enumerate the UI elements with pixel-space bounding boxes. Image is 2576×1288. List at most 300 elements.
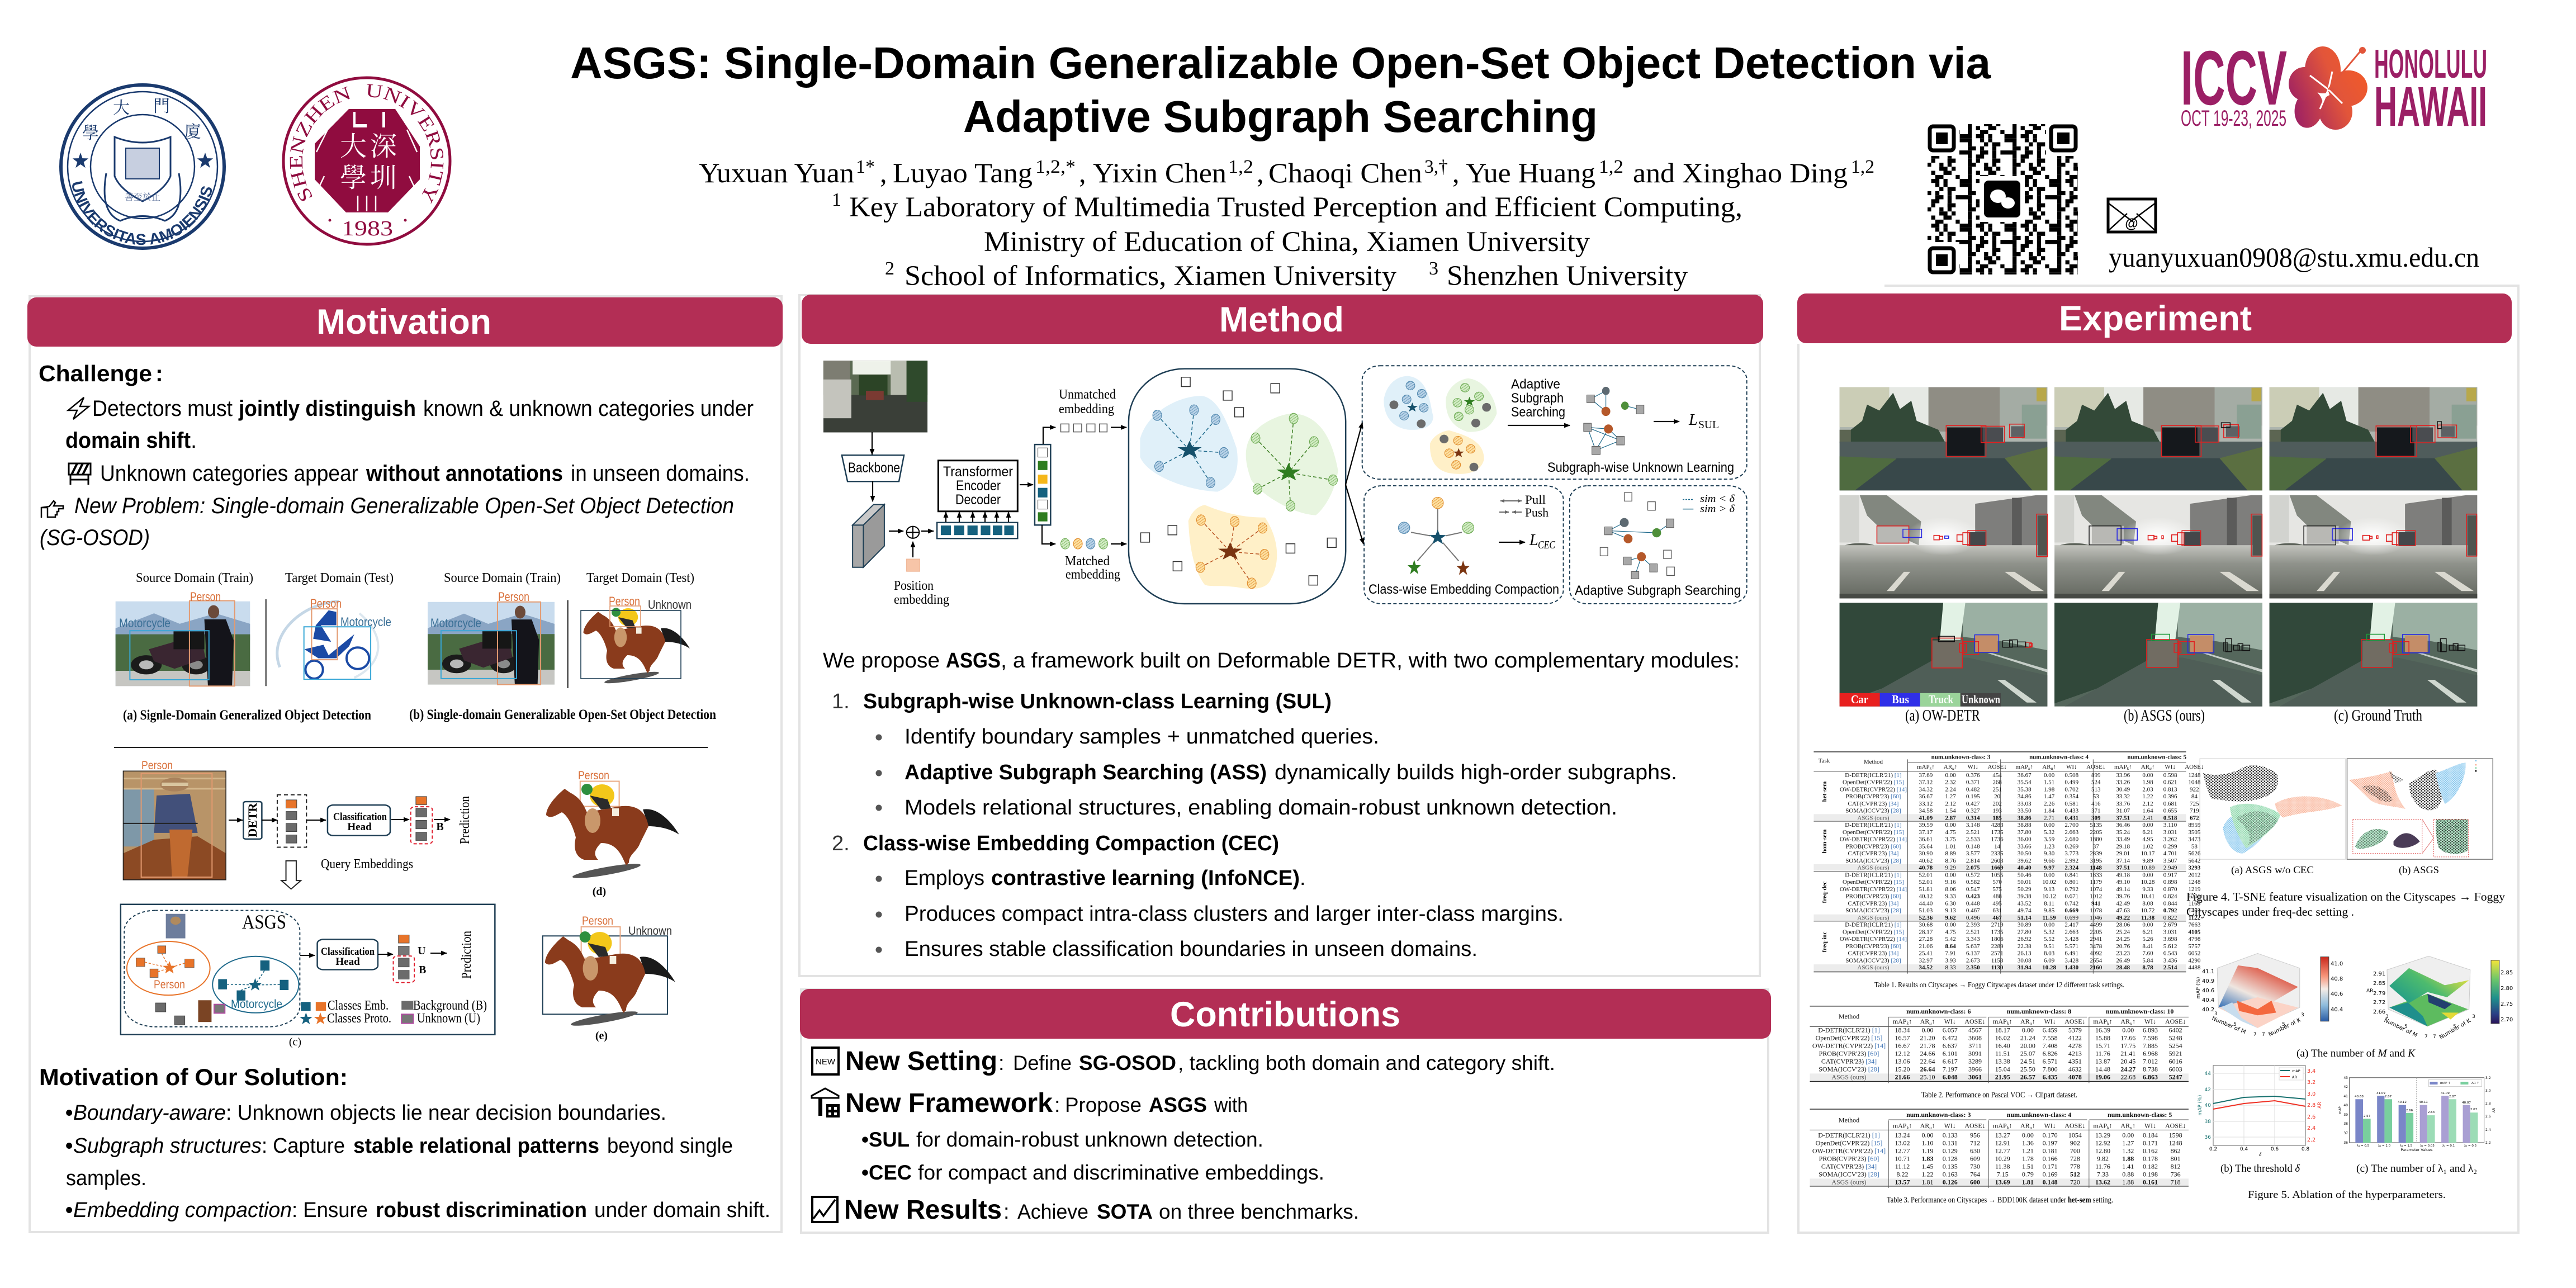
panel: Motivation	[27, 296, 783, 1232]
heading: Contributions: Contributions	[1170, 995, 1400, 1034]
table 3: Cityscapes to BDD100K: 0.162	[2143, 1147, 2158, 1154]
table 1: Cityscapes to Foggy Cityscapes: 33.03	[2018, 800, 2032, 807]
authors: Yuxuan Yuan	[699, 157, 854, 188]
line chart: threshold delta: 2.6	[2307, 1114, 2315, 1120]
table 3: Cityscapes to BDD100K: 0.184	[2143, 1131, 2158, 1139]
chart labels: 3D plots: 7	[2433, 1034, 2436, 1040]
table 3: Cityscapes to BDD100K: 0.166	[2043, 1155, 2058, 1162]
table 1: Cityscapes to Foggy Cityscapes: 2.949	[2163, 864, 2177, 871]
table 1: Cityscapes to Foggy Cityscapes: 31.94	[2018, 964, 2032, 970]
table 1: Cityscapes to Foggy Cityscapes: 3.698	[2163, 935, 2177, 942]
line chart: threshold delta: 2.4	[2307, 1125, 2315, 1131]
table 1: Cityscapes to Foggy Cityscapes: 33.49	[2116, 836, 2130, 842]
table 2: Pascal VOC to Clipart: 3289	[1968, 1058, 1982, 1065]
table 1: Cityscapes to Foggy Cityscapes: 941	[2091, 899, 2100, 907]
table 1: Cityscapes to Foggy Cityscapes: 2603	[1991, 857, 2004, 864]
line chart: threshold delta: 36	[2205, 1135, 2211, 1140]
table 2: Pascal VOC to Clipart: 16.40	[1995, 1042, 2010, 1049]
table 2: Pascal VOC to Clipart: 7.598	[2143, 1034, 2158, 1041]
table 3: Cityscapes to BDD100K: 1.10	[1922, 1139, 1933, 1147]
table 1: Cityscapes to Foggy Cityscapes: OW-DETR(CVPR'22) [14]	[1840, 886, 1907, 892]
table 3: Cityscapes to BDD100K: 0.00	[1922, 1131, 1933, 1139]
table 1: Cityscapes to Foggy Cityscapes: 1880	[2090, 836, 2102, 842]
table 2: Pascal VOC to Clipart: 6.101	[1943, 1050, 1958, 1057]
table 1: Cityscapes to Foggy Cityscapes: 37.51	[2116, 814, 2130, 821]
diagram: ASGS architecture: Pull	[1525, 493, 1546, 506]
bar chart labels: lambda: λ₂ = 0.1	[2442, 1144, 2455, 1148]
table 3: Cityscapes to BDD100K: 9.82	[2097, 1155, 2109, 1162]
figure: ASGS workflow	[121, 759, 679, 1048]
table 2: Pascal VOC to Clipart: 6.459	[2043, 1026, 2058, 1034]
table 1: Cityscapes to Foggy Cityscapes: 3.428	[2064, 956, 2078, 964]
table 1: Cityscapes to Foggy Cityscapes: 0.621	[2163, 779, 2177, 785]
table 1: Cityscapes to Foggy Cityscapes: 0.671	[2064, 893, 2078, 899]
table 1: Cityscapes to Foggy Cityscapes: 2.075	[1966, 864, 1980, 871]
table 3: Cityscapes to BDD100K: 956	[1970, 1131, 1980, 1139]
table 1: Cityscapes to Foggy Cityscapes: 4105	[2188, 928, 2200, 935]
table 1: Cityscapes to Foggy Cityscapes: 251	[1992, 785, 2002, 793]
diagram: ASGS architecture: CEC	[1538, 539, 1556, 551]
table 2: Pascal VOC to Clipart: 16.02	[1995, 1034, 2010, 1041]
table 2: Pascal VOC to Clipart: mAPk↑	[2093, 1017, 2113, 1026]
table 1: Cityscapes to Foggy Cityscapes: 38.86	[2018, 814, 2032, 821]
table 1: Cityscapes to Foggy Cityscapes: 3.148	[1966, 821, 1980, 828]
text block: method description: Models relational structures, enabling domain-robust unknown detection.	[905, 796, 1617, 820]
input street image	[823, 361, 927, 432]
authors: Chaoqi Chen	[1268, 157, 1422, 188]
table 3: Cityscapes to BDD100K: 12.91	[1995, 1139, 2010, 1147]
diagram: ASGS architecture: Subgraph-wise Unknown Learning	[1547, 460, 1734, 475]
figure: ASGS workflow: Query Embeddings	[321, 857, 413, 872]
table 1: Cityscapes to Foggy Cityscapes: 1736	[1991, 836, 2004, 842]
table 2: Pascal VOC to Clipart: num.unknown-class: 6	[1906, 1007, 1971, 1015]
table 1: Cityscapes to Foggy Cityscapes: 0.792	[2163, 907, 2177, 913]
table 1: Cityscapes to Foggy Cityscapes: 1833	[2090, 871, 2102, 878]
table 1: Cityscapes to Foggy Cityscapes: 5.637	[1966, 943, 1980, 949]
table 1: Cityscapes to Foggy Cityscapes: 10.12	[2042, 893, 2056, 899]
table 1: Cityscapes to Foggy Cityscapes: 37.12	[1919, 779, 1933, 785]
heading: Experiment	[1797, 293, 2512, 343]
table 2: Pascal VOC to Clipart: 25.50	[2020, 1066, 2035, 1073]
table 1: Cityscapes to Foggy Cityscapes: 8.06	[1945, 886, 1956, 892]
diagram: ASGS architecture: L	[1529, 532, 1538, 549]
line chart: threshold delta: 3.2	[2307, 1079, 2315, 1086]
table 1 task labels: freq-dec	[1821, 881, 1828, 903]
table 1: Cityscapes to Foggy Cityscapes: D-DETR(ICLR'21) [1]	[1845, 871, 1902, 878]
figure: SG-OSOD problem comparison: Person	[190, 590, 221, 604]
table 1: Cityscapes to Foggy Cityscapes: 10.02	[2042, 878, 2056, 885]
table 2: Pascal VOC to Clipart: 7.558	[2043, 1034, 2058, 1041]
table 3: Cityscapes to BDD100K: 0.126	[1943, 1178, 1958, 1186]
table 1: Cityscapes to Foggy Cityscapes: CAT(CVPR'23) [34]	[1848, 800, 1898, 807]
table 1: Cityscapes to Foggy Cityscapes: 4.701	[2163, 850, 2177, 856]
diagram: ASGS architecture: Push	[1525, 505, 1549, 519]
table 1: Cityscapes to Foggy Cityscapes: 0.898	[2163, 878, 2177, 885]
table 3: Cityscapes to BDD100K: 1.19	[1922, 1147, 1933, 1154]
text block: challenge: Detectors must	[92, 396, 233, 421]
table 3: Cityscapes to BDD100K: 0.161	[2143, 1178, 2158, 1186]
figure: ASGS workflow: Head	[335, 956, 360, 968]
table 2: Pascal VOC to Clipart: ASGS (ours)	[1831, 1073, 1867, 1081]
table 1: Cityscapes to Foggy Cityscapes: num.unknown-class: 3	[1931, 754, 1990, 760]
diagram: ASGS architecture: Adaptive Subgraph Searching	[1575, 583, 1741, 598]
table 1: Cityscapes to Foggy Cityscapes: 11.59	[2042, 914, 2056, 921]
figure: detection comparison grid: (a) OW-DETR	[1905, 707, 1980, 724]
table 1: Cityscapes to Foggy Cityscapes: 41.09	[1919, 814, 1933, 821]
figure: SG-OSOD problem comparison: Unknown	[648, 598, 692, 612]
text block: method description	[823, 649, 1740, 961]
table 1: Cityscapes to Foggy Cityscapes: 2.41	[2142, 814, 2153, 821]
table 1: Cityscapes to Foggy Cityscapes: 35.54	[2018, 779, 2032, 785]
affiliations: School of Informatics, Xiamen University	[905, 261, 1397, 292]
table 1: Cityscapes to Foggy Cityscapes: 309	[2091, 814, 2100, 821]
table 1: Cityscapes to Foggy Cityscapes: 0.669	[2064, 907, 2078, 913]
text block: method description: , a framework built on Deformable DETR, with two complementary modules:	[1001, 649, 1740, 673]
table 3: Cityscapes to BDD100K: 720	[2070, 1178, 2080, 1186]
bar chart labels: lambda: λ₁ = 1.5	[2400, 1144, 2413, 1148]
table 1: Cityscapes to Foggy Cityscapes: 11.38	[2141, 914, 2154, 921]
photo: rider	[123, 771, 226, 880]
logo: Shenzhen University: 學	[340, 163, 367, 193]
bar chart labels: lambda: AR ↑	[2471, 1081, 2479, 1085]
figure: ASGS workflow: (e)	[595, 1030, 608, 1042]
table 1: Cityscapes to Foggy Cityscapes: 33.12	[1919, 800, 1933, 807]
table 1: Cityscapes to Foggy Cityscapes: ASGS (ours)	[1857, 864, 1890, 871]
table 1: Cityscapes to Foggy Cityscapes: OpenDet(CVPR'22) [15]	[1843, 878, 1904, 885]
table 1: Cityscapes to Foggy Cityscapes: 9.33	[2142, 886, 2153, 892]
text block: motivation of our solution: stable relational patterns	[353, 1134, 599, 1158]
table 1: Cityscapes to Foggy Cityscapes: 34.58	[1919, 807, 1933, 814]
table 2: Pascal VOC to Clipart: 5379	[2068, 1026, 2082, 1034]
figure: SG-OSOD problem comparison: Target Domain (Test)	[285, 571, 394, 585]
table 1: Cityscapes to Foggy Cityscapes: 2.24	[1945, 785, 1956, 793]
table 1: Cityscapes to Foggy Cityscapes: 672	[2190, 814, 2199, 821]
table 1: Cityscapes to Foggy Cityscapes: 0.547	[1966, 886, 1980, 892]
table 1: Cityscapes to Foggy Cityscapes: 0.371	[1966, 779, 1980, 785]
chart labels: 3D plots: 40.4	[2202, 997, 2214, 1003]
diagram: ASGS architecture: Searching	[1511, 405, 1565, 420]
table 3: Cityscapes to BDD100K: 736	[2171, 1171, 2181, 1178]
table 2: Pascal VOC to Clipart: 7.408	[2043, 1042, 2058, 1049]
new setting: :	[998, 1052, 1005, 1075]
table 1: Cityscapes to Foggy Cityscapes: 2.521	[1966, 828, 1980, 835]
table 3: Cityscapes to BDD100K: CAT(CVPR'23) [34]	[1821, 1163, 1877, 1170]
table 1: Cityscapes to Foggy Cityscapes: 3195	[2090, 857, 2102, 864]
table 1: Cityscapes to Foggy Cityscapes: 4283	[1991, 821, 2004, 828]
bar chart labels: lambda: 40.11	[2419, 1101, 2428, 1104]
table 1: Cityscapes to Foggy Cityscapes: 185	[1992, 814, 2002, 821]
table 1: Cityscapes to Foggy Cityscapes: 4.75	[1945, 828, 1956, 835]
table 1: Cityscapes to Foggy Cityscapes: 34.52	[1919, 964, 1933, 970]
table 1: Cityscapes to Foggy Cityscapes: 631	[1992, 907, 2002, 913]
table 1: Cityscapes to Foggy Cityscapes: 6052	[2188, 950, 2200, 956]
table 3: Cityscapes to BDD100K: 0.181	[2043, 1147, 2058, 1154]
table 1: Cityscapes to Foggy Cityscapes: 4798	[2188, 935, 2200, 942]
table 2: Pascal VOC to Clipart: OpenDet(CVPR'22) [15]	[1816, 1034, 1882, 1041]
table 2: Pascal VOC to Clipart: 11.51	[1995, 1050, 2010, 1057]
table 2: Pascal VOC to Clipart: ARu↑	[1920, 1017, 1935, 1026]
figure: SG-OSOD problem comparison: Person	[609, 594, 640, 608]
table 1: Cityscapes to Foggy Cityscapes: 4092	[2090, 950, 2102, 956]
icon: crane building	[812, 1088, 840, 1117]
new framework: ASGS	[1149, 1093, 1207, 1116]
table 2: Pascal VOC to Clipart: 19.06	[2095, 1073, 2110, 1081]
table 1: Cityscapes to Foggy Cityscapes: 8.03	[2044, 950, 2054, 956]
table 1: Cityscapes to Foggy Cityscapes: PROB(CVPR'23) [60]	[1846, 893, 1901, 899]
table 1: Cityscapes to Foggy Cityscapes: num.unknown-class: 5	[2127, 754, 2186, 760]
table 2: Pascal VOC to Clipart: 21.41	[2120, 1050, 2135, 1057]
table 3: Cityscapes to BDD100K: 0.197	[2043, 1139, 2058, 1147]
table 1: Cityscapes to Foggy Cityscapes: 3505	[2188, 828, 2200, 835]
table 1: Cityscapes to Foggy Cityscapes: 575	[1992, 886, 2002, 892]
table 1: Cityscapes to Foggy Cityscapes: 3.507	[2163, 857, 2177, 864]
table 2: Pascal VOC to Clipart: 21.66	[1895, 1073, 1910, 1081]
figure: ASGS workflow: Person	[582, 915, 613, 927]
text block: method description: Class-wise Embedding Compaction (CEC)	[863, 832, 1279, 855]
table 1: Cityscapes to Foggy Cityscapes: 3.75	[1945, 836, 1956, 842]
new setting: , tackling both domain and category shift.	[1178, 1052, 1555, 1074]
table 3: Cityscapes to BDD100K: 1054	[2068, 1131, 2082, 1139]
table 1: Cityscapes to Foggy Cityscapes: ASGS (ours)	[1857, 964, 1890, 970]
text block: challenge: Challenge	[39, 361, 152, 386]
table 1: Cityscapes to Foggy Cityscapes: 1074	[2090, 886, 2102, 892]
bar chart labels: lambda: λ₁ = 1.0	[2378, 1144, 2391, 1148]
icon: road barrier	[69, 463, 91, 485]
table 1: Cityscapes to Foggy Cityscapes: 5.32	[2044, 828, 2054, 835]
text block: motivation of our solution: : Unknown objects lie near decision boundaries.	[226, 1101, 666, 1125]
figure: ASGS workflow: Classification	[321, 946, 375, 958]
table 3: Cityscapes to BDD100K: 862	[2171, 1147, 2181, 1154]
table 1: Cityscapes to Foggy Cityscapes: 5626	[2188, 850, 2200, 856]
table 1: Cityscapes to Foggy Cityscapes: 50.46	[2018, 871, 2032, 878]
table 2: Pascal VOC to Clipart: 16.57	[1895, 1034, 1910, 1041]
table 2: Pascal VOC to Clipart: 0.00	[1922, 1026, 1933, 1034]
table 1: Cityscapes to Foggy Cityscapes: AOSE↓	[2185, 763, 2204, 770]
table 1: Cityscapes to Foggy Cityscapes: 34.86	[2018, 793, 2032, 799]
table 3: Cityscapes to BDD100K: 812	[2171, 1163, 2181, 1170]
table 1: Cityscapes to Foggy Cityscapes: 24.25	[2116, 935, 2130, 942]
table 1: Cityscapes to Foggy Cityscapes: 2.673	[1966, 956, 1980, 964]
table 1: Cityscapes to Foggy Cityscapes: 35.64	[1919, 842, 1933, 850]
figure: ASGS workflow: Classification	[333, 811, 387, 823]
table 1: Cityscapes to Foggy Cityscapes: 1048	[2188, 779, 2200, 785]
table 1: Cityscapes to Foggy Cityscapes: 0.870	[2163, 886, 2177, 892]
table 1 caption: Table 1. Results on Cityscapes → Foggy Cityscapes dataset under 12 different task settings.	[1874, 981, 2124, 989]
table 1: Cityscapes to Foggy Cityscapes: 0.499	[2064, 779, 2078, 785]
table 1: Cityscapes to Foggy Cityscapes: 2.521	[1966, 928, 1980, 935]
figure: ASGS workflow: Unknown	[628, 925, 672, 937]
chart: T-SNE scatter plots: Figure 4. T-SNE feature visualization on the Cityscapes → Foggy	[2186, 890, 2506, 903]
table 1: Cityscapes to Foggy Cityscapes: 33.76	[2116, 800, 2130, 807]
table 1: Cityscapes to Foggy Cityscapes: 25.41	[1919, 950, 1933, 956]
text block: challenge: without annotations	[366, 461, 563, 486]
chart labels: 3D plots: 3	[2214, 1011, 2218, 1017]
table 1: Cityscapes to Foggy Cityscapes: 36.67	[2018, 771, 2032, 778]
table 2: Pascal VOC to Clipart: num.unknown-class: 10	[2106, 1007, 2174, 1015]
table 2: Pascal VOC to Clipart: 22.64	[1920, 1058, 1935, 1065]
table 1: Cityscapes to Foggy Cityscapes: 2571	[1991, 950, 2004, 956]
table 2: Pascal VOC to Clipart: 21.20	[1920, 1034, 1935, 1041]
table 2: Pascal VOC to Clipart: AOSE↓	[2064, 1017, 2086, 1025]
table 1: Cityscapes to Foggy Cityscapes: 33.50	[2018, 807, 2032, 814]
table 1: Cityscapes to Foggy Cityscapes: 9.16	[1945, 878, 1956, 885]
table 1: Cityscapes to Foggy Cityscapes: 922	[2190, 785, 2199, 793]
table 1: Cityscapes to Foggy Cityscapes: 8.78	[2142, 964, 2153, 970]
new framework: SUL	[869, 1128, 910, 1151]
bar chart labels: lambda: λ₁ = 0.5	[2357, 1144, 2370, 1148]
table 1 task labels	[1819, 757, 1830, 953]
table 1: Cityscapes to Foggy Cityscapes: 1012	[2090, 893, 2102, 899]
chart labels: 3D plots: 2.75	[2501, 1001, 2513, 1007]
bar chart labels: lambda: 42	[2343, 1085, 2348, 1089]
table 2: Pascal VOC to Clipart: 3711	[1968, 1042, 1982, 1049]
table 1: Cityscapes to Foggy Cityscapes: 52.01	[1919, 878, 1933, 885]
figure: ASGS workflow: B	[419, 964, 426, 976]
figure: SG-OSOD problem comparison: Person	[310, 596, 342, 610]
line chart: threshold delta: 3.4	[2307, 1068, 2315, 1074]
table 3: Cityscapes to BDD100K: 728	[2070, 1155, 2080, 1162]
diagram: ASGS architecture: embedding	[894, 593, 949, 607]
table 1: Cityscapes to Foggy Cityscapes: OpenDet(CVPR'22) [15]	[1843, 828, 1904, 835]
chart labels: 3D plots	[2196, 961, 2513, 1059]
logo: Xiamen University: 善至於止	[125, 192, 160, 202]
table 1: Cityscapes to Foggy Cityscapes: 44.40	[1919, 899, 1933, 907]
table 1: Cityscapes to Foggy Cityscapes: 4290	[2188, 956, 2200, 964]
figure: ASGS workflow: (d)	[593, 886, 606, 898]
table 3: Cityscapes to BDD100K: 0.171	[2143, 1139, 2158, 1147]
chart labels: 3D plots: Number of M	[2383, 1017, 2418, 1039]
bar chart labels: lambda: 40.68	[2355, 1095, 2364, 1098]
logo: Shenzhen University: 深	[370, 132, 397, 162]
diagram: ASGS architecture: L	[1688, 411, 1698, 429]
table 3: Cityscapes to BDD100K: AOSE↓	[2165, 1122, 2186, 1129]
table 1: Cityscapes to Foggy Cityscapes: 2.533	[1966, 836, 1980, 842]
table 1: Cityscapes to Foggy Cityscapes: 5.52	[2044, 935, 2054, 942]
text block: motivation of our solution: •	[65, 1101, 73, 1125]
table 3: Cityscapes to BDD100K: 0.00	[2022, 1131, 2034, 1139]
table 2: Pascal VOC to Clipart: 17.66	[2120, 1034, 2135, 1041]
table 1: Cityscapes to Foggy Cityscapes: 39.38	[2018, 893, 2032, 899]
table 1: Cityscapes to Foggy Cityscapes: 0.314	[1966, 814, 1980, 821]
table 1: Cityscapes to Foggy Cityscapes: 23.23	[2116, 950, 2130, 956]
3D surface plot M K AR	[2387, 956, 2499, 1026]
figure: ASGS workflow: Person	[154, 978, 185, 991]
new setting: New Setting	[845, 1046, 997, 1076]
bar chart labels: lambda: mAP ↑	[2440, 1081, 2451, 1085]
table 1: Cityscapes to Foggy Cityscapes: OpenDet(CVPR'22) [15]	[1843, 779, 1904, 785]
table 3: Cityscapes to BDD100K: 0.129	[1943, 1147, 1958, 1154]
table 2: Pascal VOC to Clipart: 15.88	[2095, 1034, 2110, 1041]
table 1: Cityscapes to Foggy Cityscapes: 0.00	[2142, 921, 2153, 928]
table 2: Pascal VOC to Clipart: 13.06	[1895, 1058, 1910, 1065]
table 1: Cityscapes to Foggy Cityscapes: OpenDet(CVPR'22) [15]	[1843, 928, 1904, 935]
table 3: Cityscapes to BDD100K: 13.57	[1895, 1178, 1910, 1186]
table 1: Cityscapes to Foggy Cityscapes: 33.26	[2116, 779, 2130, 785]
logo: Xiamen University: 門	[153, 97, 170, 116]
bar chart labels: lambda: 40	[2343, 1104, 2348, 1107]
table 1: Cityscapes to Foggy Cityscapes: 0.742	[2064, 899, 2078, 907]
table 1: Cityscapes to Foggy Cityscapes: 37.14	[2116, 857, 2130, 864]
chart labels: 3D plots: Number of K	[2438, 1017, 2472, 1041]
chart labels: 3D plots: 5	[2282, 1022, 2285, 1027]
figure: detection comparison grid: (b) ASGS (ours)	[2124, 707, 2205, 724]
table 1: Cityscapes to Foggy Cityscapes: 36.00	[2018, 836, 2032, 842]
table 1: Cityscapes to Foggy Cityscapes: 1122	[2189, 914, 2200, 921]
table 3: Cityscapes to BDD100K: 600	[1970, 1178, 1980, 1186]
table 1: Cityscapes to Foggy Cityscapes: 0.376	[1966, 771, 1980, 778]
text block: method description: contrastive learning (InfoNCE)	[991, 866, 1300, 890]
table 1: Cityscapes to Foggy Cityscapes: 8.76	[1945, 857, 1956, 864]
table 1: Cityscapes to Foggy Cityscapes: 454	[1992, 771, 2002, 778]
figure: detection comparison grid: Unknown	[1962, 693, 2000, 706]
table 1: Cityscapes to Foggy Cityscapes: 5.32	[2044, 928, 2054, 935]
table 1: Cityscapes to Foggy Cityscapes: 33.66	[2018, 842, 2032, 850]
table 1: Cityscapes to Foggy Cityscapes: 0.824	[2163, 893, 2177, 899]
table 1: Cityscapes to Foggy Cityscapes: 34.32	[1919, 785, 1933, 793]
table 1: Cityscapes to Foggy Cityscapes: 2.679	[2163, 921, 2177, 928]
new framework: •	[861, 1128, 869, 1151]
new framework: •	[861, 1161, 869, 1184]
table 3: Cityscapes to BDD100K: 1.36	[2022, 1139, 2034, 1147]
table 1: Cityscapes to Foggy Cityscapes: 52.36	[1919, 914, 1933, 921]
table 1: Cityscapes to Foggy Cityscapes: 35.38	[2018, 785, 2032, 793]
panel: subgraph-wise unknown learning	[1362, 366, 1747, 479]
table 1: Cityscapes to Foggy Cityscapes: 725	[2190, 800, 2199, 807]
table 1: Cityscapes to Foggy Cityscapes: 0.423	[1966, 893, 1980, 899]
text block: method description: Produces compact intra-class clusters and larger inter-class margins.	[905, 902, 1564, 926]
text block: method description: Adaptive Subgraph Searching (ASS)	[905, 761, 1267, 784]
table 1: Cityscapes to Foggy Cityscapes: 488	[1992, 893, 2002, 899]
table 3: Cityscapes to BDD100K: 0.170	[2043, 1131, 2058, 1139]
table 1: Cityscapes to Foggy Cityscapes: 1046	[2090, 914, 2102, 921]
table 3: Cityscapes to BDD100K: 1.51	[2022, 1163, 2034, 1170]
line chart: threshold delta: AR	[2292, 1075, 2297, 1079]
chart labels: 3D plots: 5	[2453, 1024, 2456, 1030]
text block: motivation of our solution: : Capture	[262, 1134, 345, 1158]
table 1: Cityscapes to Foggy Cityscapes: 3.436	[2163, 956, 2177, 964]
diagram: ASGS architecture	[823, 361, 1747, 607]
line chart: threshold delta	[2198, 1066, 2323, 1175]
table 1: Cityscapes to Foggy Cityscapes: 0.508	[2064, 771, 2078, 778]
diagram: ASGS architecture: Encoder	[956, 478, 1001, 494]
table 1: Cityscapes to Foggy Cityscapes: 5.84	[2142, 956, 2153, 964]
authors: 1,2	[1599, 157, 1623, 177]
text block: method description: Ensures stable classification boundaries in unseen domains.	[905, 937, 1478, 961]
affiliations: Key Laboratory of Multimedia Trusted Perception and Efficient Computing,	[849, 192, 1742, 223]
new framework	[845, 1088, 1324, 1184]
table 1: Cityscapes to Foggy Cityscapes: 31.07	[2116, 807, 2130, 814]
table 2: Pascal VOC to Clipart: 24.27	[2120, 1066, 2135, 1073]
table 2: Pascal VOC to Clipart: 6402	[2169, 1026, 2182, 1034]
new setting: Define	[1013, 1052, 1072, 1074]
text block: challenge: .	[191, 428, 197, 453]
bar chart labels: lambda: 2.8	[2485, 1102, 2491, 1106]
figure: ASGS workflow: Prediction	[460, 931, 474, 979]
table 1: Cityscapes to Foggy Cityscapes: 30.50	[2018, 850, 2032, 856]
chart labels: 3D plots: 7	[2425, 1034, 2428, 1040]
title: Adaptive Subgraph Searching	[963, 92, 1598, 141]
table 2: Pascal VOC to Clipart: PROB(CVPR'23) [60]	[1819, 1050, 1879, 1057]
new framework: Propose	[1065, 1093, 1142, 1116]
table 1: Cityscapes to Foggy Cityscapes: 27.80	[2018, 928, 2032, 935]
table 1: Cityscapes to Foggy Cityscapes: 2.87	[1945, 814, 1956, 821]
chart labels: 3D plots: (a) The number of M and K	[2296, 1048, 2416, 1059]
table 1: Cityscapes to Foggy Cityscapes: 3.93	[1945, 956, 1956, 964]
table 1: Cityscapes to Foggy Cityscapes: 30.49	[2116, 785, 2130, 793]
table 2: Pascal VOC to Clipart: 6.863	[2143, 1073, 2158, 1081]
table 1: Cityscapes to Foggy Cityscapes: 37.80	[2018, 828, 2032, 835]
table 1: Cityscapes to Foggy Cityscapes: CAT(CVPR'23) [34]	[1848, 950, 1898, 956]
